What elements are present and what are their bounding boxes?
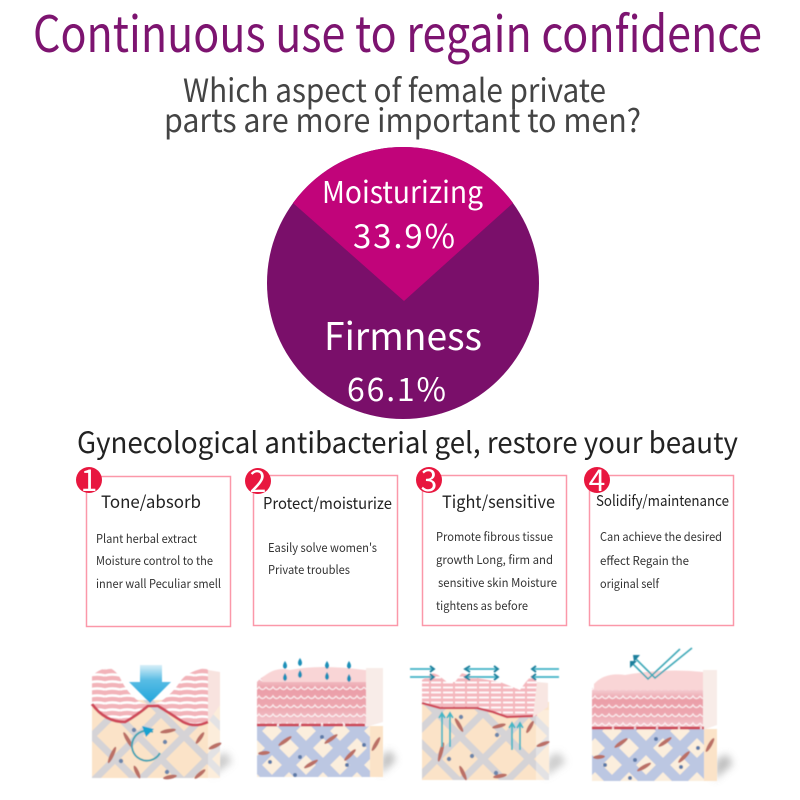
text: step 1 xyxy=(96,530,221,592)
icon: skin block 1, absorb xyxy=(92,665,232,780)
text: step 1: Moisture control to the xyxy=(96,552,213,569)
arrows: upward xyxy=(439,713,523,750)
heading: step 1: Tone/absorb xyxy=(101,488,201,513)
text: step 3: growth Long, firm and xyxy=(436,551,553,568)
pie chart xyxy=(267,147,539,419)
text: step 3: Promote fibrous tissue xyxy=(436,528,553,545)
badge 1 xyxy=(76,456,102,500)
segment: moisturizing xyxy=(293,147,513,301)
value: moisturizing: 33.9% xyxy=(353,210,455,258)
badge 3: 3 xyxy=(421,456,437,500)
heading: step 4: Solidify/maintenance xyxy=(596,490,729,511)
value: firmness: 66.1% xyxy=(347,365,446,411)
subtitle xyxy=(164,66,641,142)
badge 4 xyxy=(584,456,610,500)
cells xyxy=(106,728,222,780)
text: step 3: sensitive skin Moisture xyxy=(438,574,557,591)
panel: step 4 xyxy=(584,456,734,626)
icon: skin block 4, maintain xyxy=(592,648,733,781)
text: step 2: Easily solve women's xyxy=(268,539,377,556)
icon: skin block 2, moisturize xyxy=(257,658,396,777)
badge 4: 4 xyxy=(589,456,605,500)
subtitle: parts are more important to men? xyxy=(164,96,641,142)
cells xyxy=(593,736,716,773)
panel: step 1 xyxy=(76,456,230,626)
text: step 4: original self xyxy=(600,575,660,592)
arrow: down xyxy=(129,665,171,703)
text: step 3 xyxy=(436,528,557,614)
section heading: Gynecological antibacterial gel, restore your beauty xyxy=(77,420,738,462)
label: firmness: Firmness xyxy=(324,306,482,361)
arrow: circulation xyxy=(132,731,160,761)
badge 3 xyxy=(416,456,442,500)
text: step 3: tightens as before xyxy=(436,597,528,614)
arrows: horizontal xyxy=(410,666,559,680)
text: step 2 xyxy=(268,539,377,578)
heading: step 3: Tight/sensitive xyxy=(442,488,555,513)
subtitle: Which aspect of female private xyxy=(183,66,606,112)
text: step 4: effect Regain the xyxy=(600,552,689,569)
badge 2: 2 xyxy=(250,457,266,501)
cells xyxy=(258,733,382,770)
text: step 1: Plant herbal extract xyxy=(96,530,197,547)
text: step 2: Private troubles xyxy=(268,561,350,578)
badge 1: 1 xyxy=(81,456,97,500)
arrows: reflection xyxy=(630,648,692,679)
heading: step 2: Protect/moisturize xyxy=(263,490,392,514)
icon: water drops xyxy=(283,658,351,682)
label: moisturizing: Moisturizing xyxy=(322,168,483,212)
text: step 4 xyxy=(600,528,722,592)
text: step 4: Can achieve the desired xyxy=(600,528,722,545)
panel: step 3 xyxy=(416,456,566,626)
text: step 1: inner wall Peculiar smell xyxy=(96,575,221,592)
cells xyxy=(436,717,550,781)
icon: skin block 3, tighten xyxy=(410,666,566,781)
panel: step 2 xyxy=(245,457,398,626)
badge 2 xyxy=(245,457,271,501)
